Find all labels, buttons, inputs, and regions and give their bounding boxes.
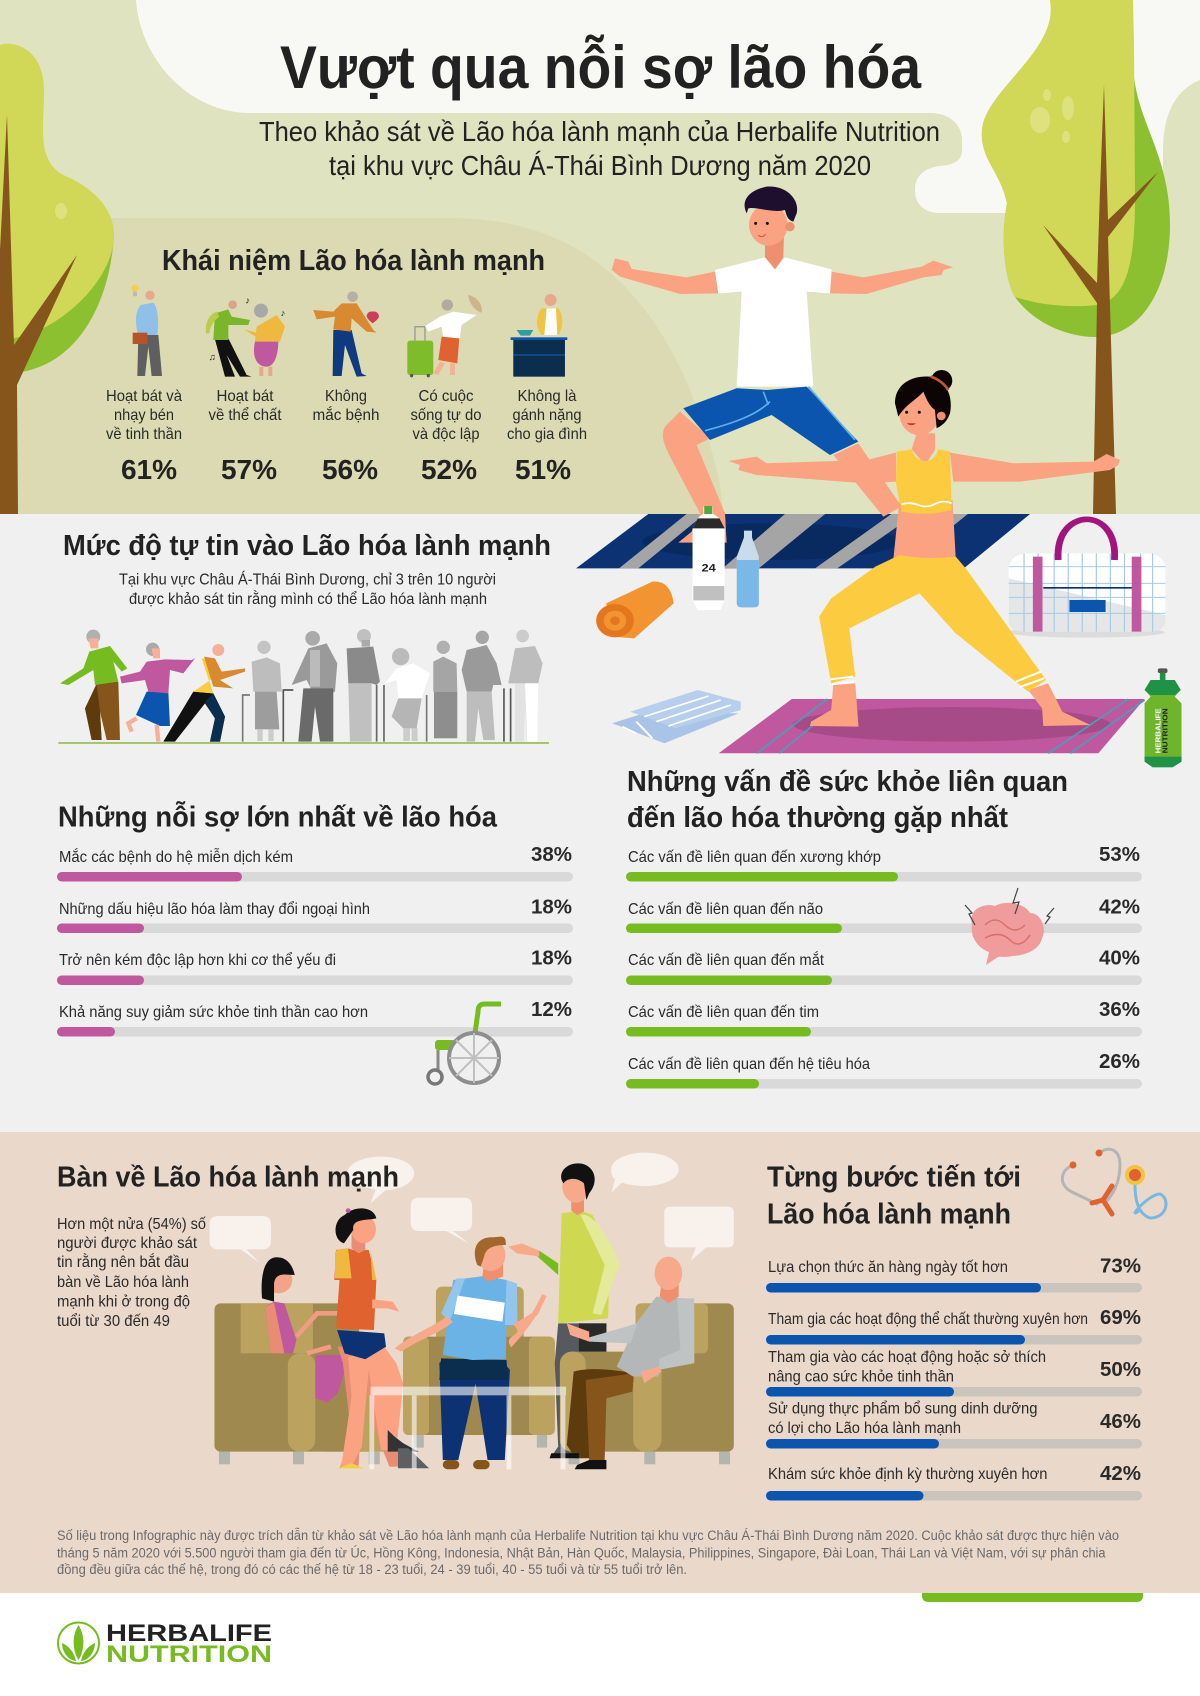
icon: dancing couple: ♪: [245, 295, 250, 305]
chart: steps bars: có lợi cho Lão hóa lành mạnh: [768, 1420, 961, 1437]
title: Vượt qua nỗi sợ lão hóa: [280, 34, 922, 101]
icon: healthy man with heart: [313, 291, 379, 377]
heading: health issues: đến lão hóa thường gặp nhất: [627, 802, 1008, 834]
concept labels and percentages: nhạy bén: [114, 407, 174, 424]
subtitle: [259, 116, 940, 181]
illustration: blue yoga mat: [576, 514, 1030, 568]
chart: health issue bars: 42%: [1099, 896, 1140, 918]
icon: rolled orange towel: [596, 582, 674, 638]
chart: biggest fears bars: 12%: [531, 998, 572, 1021]
illustration: pink yoga mat: [719, 699, 1145, 753]
grey elderly figures: [243, 629, 543, 742]
icons: five concept figures: [131, 285, 567, 377]
heading: health issues: [627, 766, 1068, 834]
text: discussion description: bàn về Lão hóa lành: [57, 1274, 189, 1291]
standing man in lime: [508, 1163, 619, 1323]
middle sofa: [403, 1287, 555, 1435]
yellow man: [163, 644, 245, 742]
text: discussion description: tin rằng nên bắt đầu: [57, 1252, 189, 1271]
illustration: bottles, towels and bag: [596, 506, 1165, 743]
footnote: Số liệu trong Infographic này được trích dẫn từ khảo sát về Lão hóa lành mạnh của Herbalife Nutrition tại khu vực Châu Á-Thái Bình Dương năm 2020. Cuộc khảo sát được thực hiện vào: [57, 1528, 1119, 1543]
heading: health issues: Những vấn đề sức khỏe liên quan: [627, 766, 1068, 798]
footnote: tháng 5 năm 2020 với 5.500 người tham gia đến từ Úc, Hồng Kông, Indonesia, Nhật Bản, Hàn Quốc, Malaysia, Philippines, Singapore, Đài Loan, Thái Lan và Việt Nam, với sự phân chia: [57, 1546, 1106, 1560]
icon: folded blue towels: [612, 690, 741, 743]
concept labels and percentages: và độc lập: [412, 426, 480, 443]
concept labels and percentages: 57%: [221, 454, 277, 485]
panel: middle grey background: [0, 514, 1200, 1132]
icon: dancing couple: [206, 295, 285, 377]
icon: green sports bottle: NUTRITION: [1162, 708, 1170, 753]
icon: stethoscope: [1062, 1149, 1166, 1218]
right sofa: [560, 1303, 734, 1452]
concept labels and percentages: 52%: [421, 454, 477, 485]
chart: steps bars: 73%: [1100, 1254, 1141, 1278]
chart: biggest fears bars: 38%: [531, 843, 572, 866]
concept labels and percentages: sống tự do: [410, 407, 482, 424]
chart: steps bars: 50%: [1100, 1358, 1141, 1381]
icon: gym bag: [1008, 519, 1165, 638]
green man: [60, 630, 127, 740]
chart: health issue bars: Các vấn đề liên quan đến tim: [628, 1004, 819, 1021]
concept labels and percentages: Không: [325, 388, 367, 405]
illustration: people talking on sofas: [210, 1153, 734, 1469]
text: discussion description: người được khảo sát: [57, 1235, 198, 1252]
chart: steps bars: Tham gia vào các hoạt động hoặc sở thích: [768, 1349, 1046, 1366]
icon: dancing couple: ♪: [281, 308, 285, 318]
pink woman: [120, 643, 195, 742]
standing woman in orange: [334, 1208, 429, 1468]
chart: steps bars: [766, 1254, 1142, 1500]
icon: wheelchair: [428, 1004, 501, 1084]
subtitle: Theo khảo sát về Lão hóa lành mạnh của Herbalife Nutrition: [259, 116, 940, 147]
heading: biggest fears: Những nỗi sợ lớn nhất về lão hóa: [58, 800, 498, 834]
chart: steps bars: 69%: [1100, 1306, 1141, 1329]
concept labels and percentages: về tinh thần: [106, 426, 182, 443]
text: confidence description: được khảo sát tin rằng mình có thể Lão hóa lành mạnh: [129, 589, 487, 608]
icon: water bottle: [737, 531, 759, 607]
logo: Herbalife Nutrition: NUTRITION: [106, 1641, 272, 1668]
chart: biggest fears bars: [57, 843, 573, 1036]
icon: man with idea: [131, 285, 162, 376]
text: discussion description: Hơn một nửa (54%) số: [57, 1216, 206, 1233]
heading: steps to healthy ageing: Từng bước tiến tới: [767, 1162, 1021, 1194]
heading: steps to healthy ageing: [767, 1162, 1021, 1230]
concept labels and percentages: gánh nặng: [512, 407, 582, 424]
heading: healthy ageing concept: Khái niệm Lão hóa lành mạnh: [162, 245, 545, 277]
chart: steps bars: 42%: [1100, 1462, 1141, 1485]
concept labels and percentages: Hoạt bát và: [106, 388, 182, 405]
subtitle: tại khu vực Châu Á-Thái Bình Dương năm 2020: [329, 150, 871, 181]
chart: health issue bars: 26%: [1099, 1050, 1140, 1073]
chart: health issue bars: 53%: [1099, 843, 1140, 866]
chart: health issue bars: Các vấn đề liên quan đến não: [628, 901, 823, 918]
chart: steps bars: Khám sức khỏe định kỳ thường xuyên hơn: [768, 1466, 1048, 1483]
concept labels and percentages: mắc bệnh: [312, 405, 380, 424]
text: confidence description: [119, 570, 496, 608]
icon: dancing couple: ♫: [209, 352, 216, 362]
concept labels and percentages: Có cuộc: [418, 388, 474, 405]
chart: steps bars: Lựa chọn thức ăn hàng ngày tốt hơn: [768, 1259, 1008, 1276]
chart: health issue bars: 40%: [1099, 946, 1140, 970]
chart: steps bars: Tham gia các hoạt động thể chất thường xuyên hơn: [768, 1310, 1088, 1328]
icon: woman cooking at counter: [511, 294, 567, 377]
illustration: woman upper body: [728, 370, 1120, 514]
icon: brain: [965, 888, 1054, 965]
icon: woman with suitcase: [407, 295, 482, 377]
footnote: đồng đều giữa các thế hệ, trong đó có các thế hệ từ 18 - 23 tuổi, 24 - 39 tuổi, 40 - 55 tuổi và từ 55 tuổi trở lên.: [57, 1562, 687, 1577]
icon: green sports bottle: HERBALIFE: [1155, 708, 1163, 753]
chart: steps bars: nâng cao sức khỏe tinh thần: [768, 1368, 954, 1386]
icon: left tree: [0, 44, 114, 514]
text: discussion description: tuổi từ 30 đến 49: [57, 1312, 170, 1330]
panel: lower beige background: [0, 1132, 1200, 1593]
illustration: man in yoga pose: [612, 187, 953, 543]
chart: biggest fears bars: Những dấu hiệu lão hóa làm thay đổi ngoại hình: [59, 900, 370, 918]
chart: biggest fears bars: Trở nên kém độc lập hơn khi cơ thể yếu đi: [59, 951, 336, 969]
seated older man: [550, 1257, 694, 1469]
chart: health issue bars: Các vấn đề liên quan đến mắt: [628, 950, 825, 969]
concept labels and percentages: 51%: [515, 454, 571, 485]
chart: steps bars: Sử dụng thực phẩm bổ sung dinh dưỡng: [768, 1400, 1038, 1418]
illustration: woman lower body: [810, 500, 1090, 727]
logo: Herbalife Nutrition: [58, 1620, 272, 1668]
concept labels and percentages: 56%: [322, 454, 378, 485]
panel: top landscape background: [0, 0, 1200, 514]
chart: steps bars: 46%: [1100, 1410, 1141, 1433]
seated man centre: [395, 1237, 544, 1469]
left sofa: [214, 1303, 386, 1452]
chart: biggest fears bars: 18%: [531, 946, 572, 970]
icon: right tree: [982, 0, 1170, 514]
chart: health issue bars: 36%: [1099, 998, 1140, 1021]
speech bubbles: [210, 1153, 734, 1263]
sofa legs: [219, 1435, 730, 1464]
heading: discussing healthy ageing: Bàn về Lão hóa lành mạnh: [57, 1162, 399, 1194]
text: discussion description: [57, 1216, 206, 1330]
text: confidence description: Tại khu vực Châu Á-Thái Bình Dương, chỉ 3 trên 10 người: [119, 570, 496, 588]
chart: biggest fears bars: Mắc các bệnh do hệ miễn dịch kém: [59, 847, 293, 866]
concept labels and percentages: Không là: [518, 388, 577, 405]
chart: biggest fears bars: Khả năng suy giảm sức khỏe tinh thần cao hơn: [59, 1004, 368, 1021]
chart: health issue bars: Các vấn đề liên quan đến xương khớp: [628, 849, 881, 866]
logo: Herbalife Nutrition: HERBALIFE: [106, 1620, 272, 1647]
concept labels and percentages: về thể chất: [208, 406, 282, 424]
seated woman left: [262, 1257, 350, 1403]
concept labels and percentages: Hoạt bát: [216, 388, 274, 405]
icon: green sports bottle: [1145, 668, 1182, 767]
concept labels and percentages: 61%: [121, 454, 177, 485]
glass coffee table: [369, 1387, 566, 1469]
illustration: group of elderly people: [58, 629, 549, 744]
icon: white shaker bottle: 24: [701, 562, 716, 574]
chart: health issue bars: Các vấn đề liên quan đến hệ tiêu hóa: [628, 1056, 870, 1073]
concept labels and percentages: [106, 388, 587, 485]
text: discussion description: mạnh khi ở trong độ: [57, 1294, 190, 1310]
green strip under beige panel: [922, 1593, 1143, 1602]
chart: health issue bars: [626, 843, 1142, 1088]
icon: white shaker bottle: [693, 506, 725, 610]
heading: confidence: Mức độ tự tin vào Lão hóa lành mạnh: [63, 530, 551, 562]
concept labels and percentages: cho gia đình: [507, 426, 587, 443]
standing man legs: [551, 1323, 606, 1457]
chart: biggest fears bars: 18%: [531, 896, 572, 918]
footnote: [57, 1528, 1119, 1577]
heading: steps to healthy ageing: Lão hóa lành mạnh: [767, 1198, 1011, 1230]
